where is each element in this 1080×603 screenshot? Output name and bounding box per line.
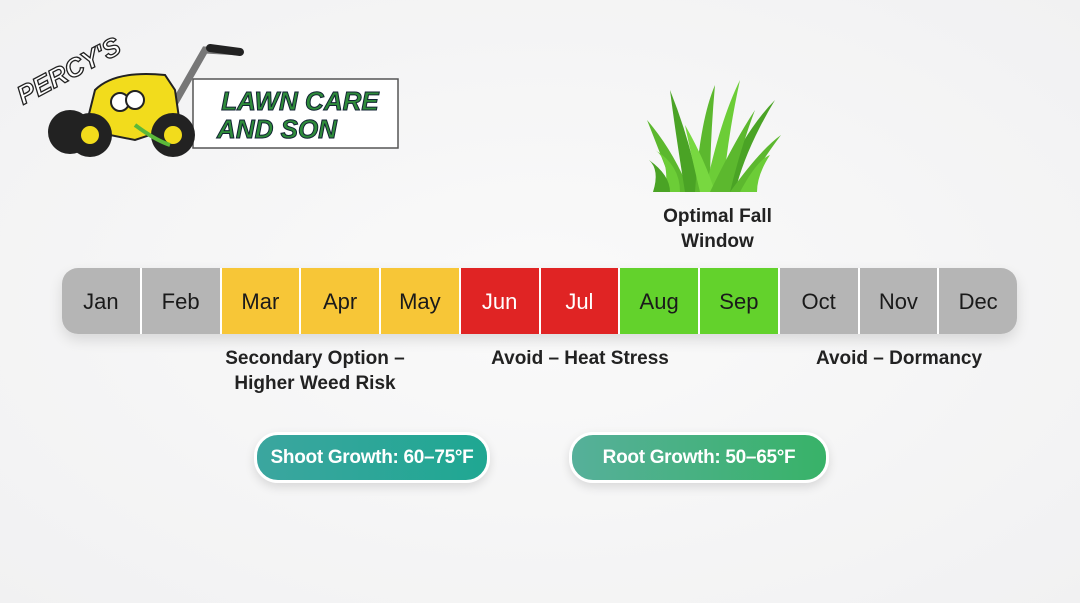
label: optimal fall window: Optimal Fall bbox=[663, 206, 772, 227]
icon: grass bbox=[647, 80, 781, 192]
timeline bar: Oct bbox=[802, 289, 836, 314]
label: avoid dormancy: Avoid – Dormancy bbox=[816, 348, 982, 369]
label: secondary option: Higher Weed Risk bbox=[234, 373, 396, 394]
logo bbox=[15, 30, 399, 157]
label: secondary option: Secondary Option – bbox=[225, 348, 405, 369]
logo: AND SON bbox=[216, 114, 338, 144]
timeline bar: Jul bbox=[565, 289, 593, 314]
pill: shoot growth: Shoot Growth: 60–75°F bbox=[271, 446, 473, 468]
pill: shoot growth bbox=[254, 432, 490, 483]
timeline bar: Feb bbox=[162, 289, 200, 314]
timeline bar: Mar bbox=[241, 289, 279, 314]
Percy's text: PERCY'S bbox=[15, 30, 126, 110]
timeline bar: Aug bbox=[640, 289, 679, 314]
pill: root growth bbox=[569, 432, 829, 483]
label: secondary option bbox=[225, 348, 405, 394]
timeline bar: Jan bbox=[83, 289, 119, 314]
timeline bar: Nov bbox=[879, 289, 918, 314]
Lawn care text: LAWN CARE bbox=[221, 86, 379, 116]
timeline bar bbox=[62, 268, 1017, 334]
timeline bar: Sep bbox=[719, 289, 758, 314]
label: optimal fall window bbox=[663, 206, 772, 252]
wheels bbox=[48, 110, 92, 154]
pill: root growth: Root Growth: 50–65°F bbox=[603, 446, 795, 468]
timeline bar: May bbox=[399, 289, 441, 314]
label: optimal fall window: Window bbox=[681, 231, 754, 252]
timeline bar: Jun bbox=[482, 289, 517, 314]
logo box bbox=[193, 79, 398, 148]
timeline bar: Apr bbox=[323, 289, 357, 314]
mower body bbox=[85, 74, 180, 140]
mower handle bbox=[165, 50, 240, 120]
timeline bar: Dec bbox=[959, 289, 998, 314]
label: avoid heat stress: Avoid – Heat Stress bbox=[491, 348, 669, 369]
